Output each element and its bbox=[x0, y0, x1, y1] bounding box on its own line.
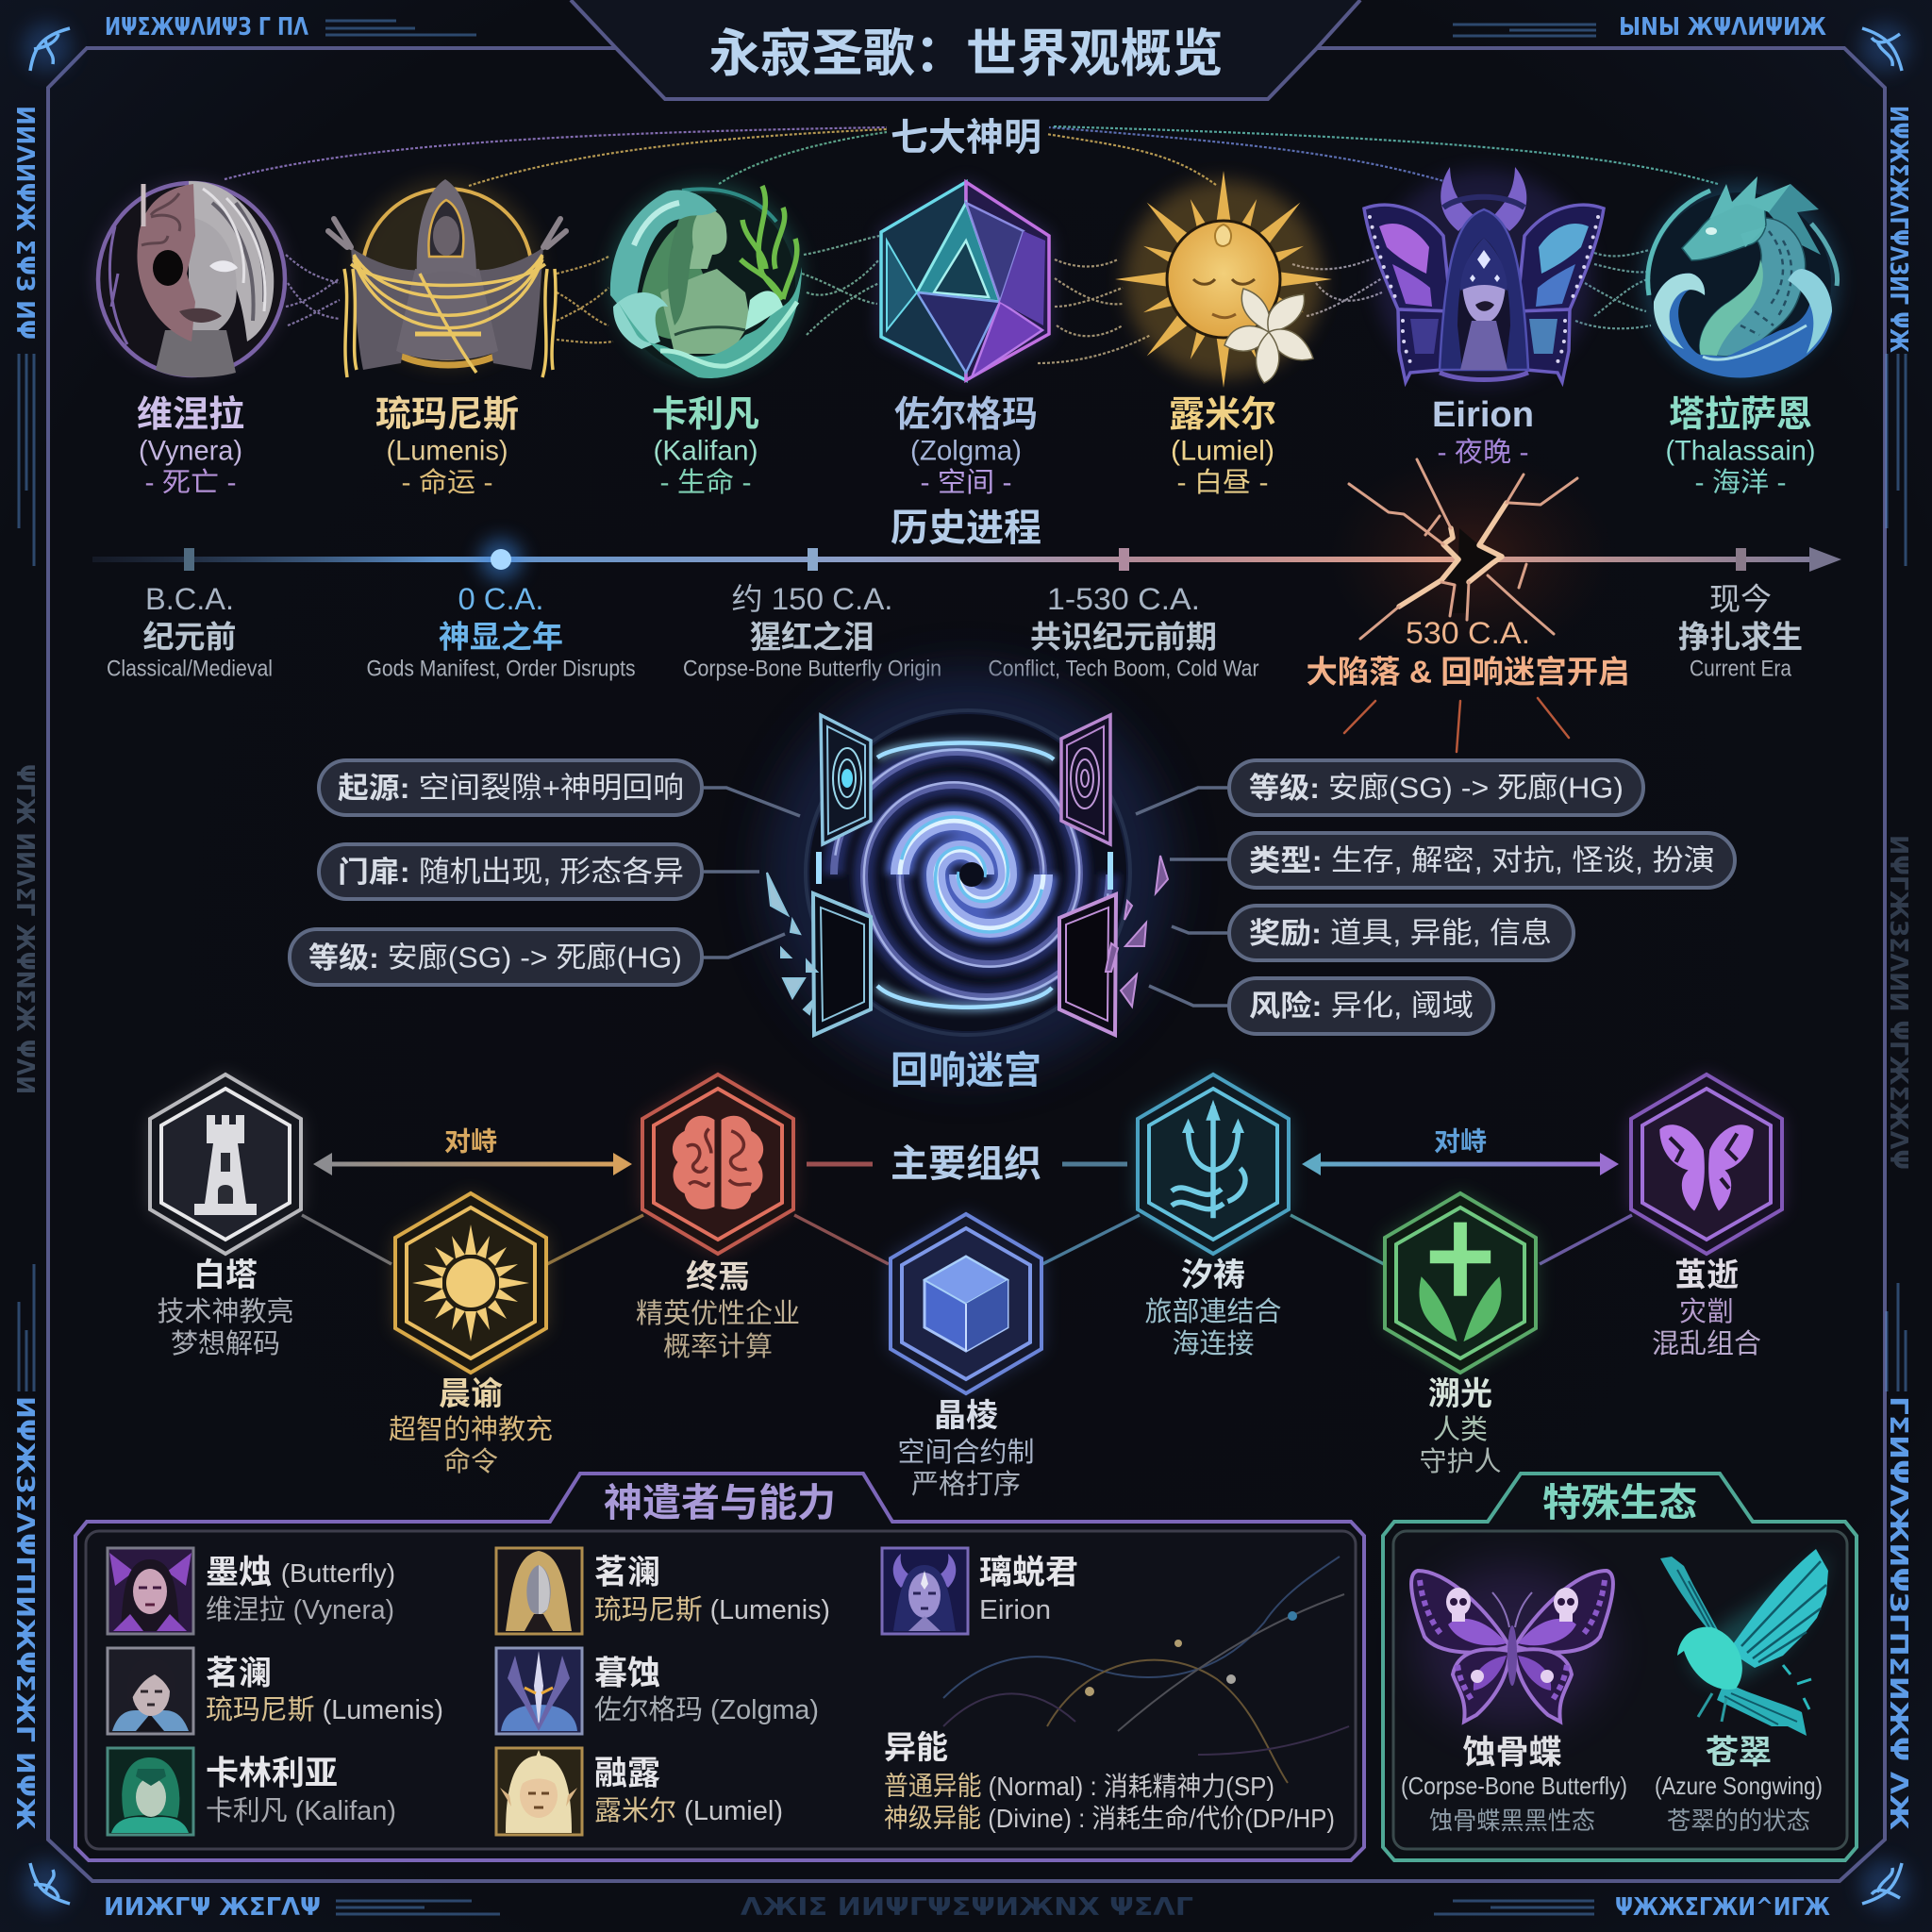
entry: Minglan gold: 茗澜 bbox=[594, 1555, 660, 1591]
org: Cocoon Passing: 茧逝 bbox=[1674, 1257, 1739, 1293]
callout: types: 类型: 生存, 解密, 对抗, 怪谈, 扮演 bbox=[1249, 843, 1715, 877]
Kalifan name: - 生命 - bbox=[660, 467, 751, 498]
border runes: ИΨΣЖΨΛИΨЗ Γ ΠΛ bbox=[105, 13, 308, 42]
abilities text bbox=[884, 1730, 1335, 1832]
timeline labels: 大陷落 & 回响迷宫开启 bbox=[1306, 655, 1630, 689]
god: Lumiel bbox=[1115, 171, 1332, 388]
Zolgma name: 佐尔格玛 bbox=[894, 395, 1038, 435]
portrait: Minglan gold bbox=[496, 1548, 582, 1634]
entry: Eirion: Eirion bbox=[979, 1595, 1051, 1625]
entry: Butterfly: 墨烛 (Butterfly) bbox=[206, 1555, 395, 1591]
timeline labels: Gods Manifest, Order Disrupts bbox=[366, 657, 636, 681]
creature labels: songwing: (Azure Songwing) bbox=[1655, 1772, 1823, 1800]
callout: rank left: 等级: 安廊(SG) -> 死廊(HG) bbox=[308, 941, 682, 974]
org: Dawn Oracle: 晨谕 bbox=[439, 1376, 503, 1412]
timeline labels: 共识纪元前期 bbox=[1030, 619, 1217, 655]
portrait: Muzhu bbox=[496, 1648, 582, 1734]
org: Cocoon Passing bbox=[1631, 1074, 1782, 1359]
border runes: ИΨЖЗΣΛΨΓΠИЖΨΣЖΓ ИΨЖ bbox=[10, 1396, 39, 1830]
border runes: ИΨΓЖЗΣΛИИ ΨΓЖΣЖΛΨ bbox=[1884, 835, 1912, 1170]
border runes: ИИЖΓΨ ЖΣΓΛΨ bbox=[104, 1893, 321, 1922]
Lumiel name: - 白昼 - bbox=[1177, 467, 1268, 498]
door bottom right shattered bbox=[1059, 856, 1168, 1035]
org: Crystal Edge bbox=[891, 1214, 1041, 1500]
opposition arrow right: 对峙 bbox=[1434, 1126, 1487, 1157]
callout: risk: 风险: 异化, 阈域 bbox=[1249, 989, 1474, 1023]
abilities text: 神级异能 (Divine) : 消耗生命/代价(DP/HP) bbox=[884, 1804, 1335, 1832]
entry: Butterfly bbox=[206, 1555, 395, 1625]
door top left bbox=[821, 715, 871, 844]
door bottom left shattered bbox=[767, 873, 871, 1035]
Kalifan name: 卡利凡 bbox=[652, 395, 759, 435]
callout: rank right bbox=[1229, 760, 1643, 815]
Eirion name: - 夜晚 - bbox=[1438, 437, 1528, 468]
callout: rank left bbox=[290, 929, 702, 985]
panel heading: 神遣者与能力 bbox=[604, 1481, 836, 1524]
org: Dawn Oracle bbox=[389, 1193, 553, 1477]
icon: corpse-bone butterfly bbox=[1411, 1566, 1613, 1726]
timeline labels: 挣扎求生 bbox=[1678, 619, 1803, 655]
opposition arrow right bbox=[1302, 1126, 1619, 1175]
timeline labels: Corpse-Bone Butterfly Origin bbox=[683, 657, 941, 681]
ability curves bbox=[943, 1557, 1349, 1783]
creature labels: butterfly: 蚀骨蝶黑黑性态 bbox=[1429, 1807, 1595, 1835]
entry: Minglan gold: 琉玛尼斯 (Lumenis) bbox=[594, 1594, 830, 1625]
entry: Kalinliya: 卡利凡 (Kalifan) bbox=[206, 1795, 396, 1826]
heading: history: 历史进程 bbox=[891, 508, 1041, 549]
Lumenis name bbox=[375, 395, 519, 498]
panel: emissaries and abilities bbox=[75, 1474, 1364, 1860]
org: Finality: 精英优性企业 bbox=[636, 1298, 800, 1329]
org connectors bbox=[302, 1164, 1632, 1264]
creature labels: butterfly: (Corpse-Bone Butterfly) bbox=[1401, 1772, 1627, 1800]
org: White Tower: 白塔 bbox=[193, 1257, 258, 1293]
panel: special ecology bbox=[1383, 1474, 1857, 1860]
entry: Minglan dark: 琉玛尼斯 (Lumenis) bbox=[206, 1694, 443, 1725]
timeline labels: Current Era bbox=[1690, 657, 1792, 681]
callout: rank right: 等级: 安廊(SG) -> 死廊(HG) bbox=[1249, 772, 1624, 804]
Vynera name: (Vynera) bbox=[139, 436, 242, 466]
org: White Tower: 技术神教亮 bbox=[157, 1296, 294, 1327]
org: Tide Prayer bbox=[1138, 1074, 1289, 1359]
Lumenis name: 琉玛尼斯 bbox=[375, 395, 519, 435]
entry: Muzhu: 佐尔格玛 (Zolgma) bbox=[594, 1694, 819, 1725]
heading: organizations: 主要组织 bbox=[891, 1143, 1041, 1185]
timeline labels: 0 C.A. bbox=[458, 582, 543, 616]
creature labels: songwing bbox=[1655, 1734, 1823, 1835]
bright ring arcs bbox=[819, 742, 1110, 1008]
org: Tide Prayer: 旅部連结合 bbox=[1144, 1296, 1282, 1327]
timeline labels bbox=[107, 581, 1803, 689]
callouts left bbox=[290, 760, 702, 985]
vortex arms bbox=[823, 734, 1121, 1015]
entry: Ronglu bbox=[594, 1755, 783, 1826]
creature labels: songwing: 苍翠的的状态 bbox=[1667, 1807, 1810, 1835]
timeline labels: 神显之年 bbox=[439, 619, 563, 655]
timeline labels: 猩红之泪 bbox=[750, 619, 874, 655]
border runes: ИΨЖΣЖΛΓΨΛЗИΓ ΨЖ bbox=[1884, 106, 1912, 353]
timeline labels: 530 C.A. bbox=[1406, 616, 1530, 650]
portrait: Eirion bbox=[882, 1548, 968, 1634]
Zolgma name: - 空间 - bbox=[921, 467, 1011, 498]
opposition arrow left bbox=[313, 1126, 632, 1175]
border runes: ΨΓЖ ИИΛΣΓ ЖΨΝΣЖ ΨΛИ bbox=[10, 764, 39, 1094]
door top right bbox=[1061, 715, 1110, 844]
callout: threshold: 门扉: 随机出现, 形态各异 bbox=[338, 855, 684, 889]
Zolgma name: (Zolgma) bbox=[910, 436, 1022, 466]
god: Lumenis bbox=[328, 179, 566, 377]
callout: rewards bbox=[1229, 906, 1574, 960]
org: Cocoon Passing: 混乱组合 bbox=[1652, 1328, 1761, 1359]
org: Crystal Edge: 晶棱 bbox=[934, 1398, 998, 1434]
Eirion name: Eirion bbox=[1432, 395, 1534, 435]
entry: Ronglu: 融露 bbox=[594, 1755, 660, 1792]
entry: Eirion: 璃蜕君 bbox=[979, 1555, 1078, 1591]
org: Tide Prayer: 海连接 bbox=[1172, 1328, 1255, 1359]
org: Retro Light: 溯光 bbox=[1428, 1376, 1492, 1412]
portal illustration bbox=[765, 670, 1171, 1075]
icon: azure songwing bbox=[1660, 1549, 1828, 1736]
abilities text: 异能 bbox=[884, 1730, 948, 1766]
org: Retro Light: 守护人 bbox=[1419, 1446, 1502, 1477]
right wings bbox=[1517, 205, 1604, 382]
border runes: ΛЖΙΣ ИИΨΓΨΣΨИЖΝΧ ΨΣΛΓ bbox=[741, 1893, 1193, 1922]
heading: seven gods: 七大神明 bbox=[891, 117, 1041, 158]
god: Vynera bbox=[97, 181, 286, 377]
panel heading: 特殊生态 bbox=[1542, 1481, 1697, 1524]
border runes: ΨЖЖΣΓЖИ^ИΓЖ bbox=[1615, 1893, 1830, 1922]
org: Dawn Oracle: 命令 bbox=[443, 1446, 498, 1477]
Lumenis name: - 命运 - bbox=[402, 467, 492, 498]
Eirion name bbox=[1432, 395, 1534, 468]
portrait: Ronglu bbox=[496, 1748, 582, 1835]
Thalassain name: (Thalassain) bbox=[1666, 436, 1815, 466]
god: Kalifan bbox=[609, 182, 802, 378]
entry: Ronglu: 露米尔 (Lumiel) bbox=[594, 1795, 783, 1826]
callout: origin: 起源: 空间裂隙+神明回响 bbox=[338, 772, 684, 804]
title: 永寂圣歌：世界观概览 bbox=[708, 25, 1224, 83]
god names bbox=[137, 395, 1815, 498]
border runes: ИИΛИΨЖ ΣΨЗ ИΨ bbox=[10, 106, 39, 340]
Lumiel name: (Lumiel) bbox=[1171, 436, 1274, 466]
callouts right bbox=[1229, 760, 1735, 1034]
entry: Minglan gold bbox=[594, 1555, 830, 1625]
border runes: ЫΝЫ ЖΨΛИΨИЖ bbox=[1619, 13, 1826, 42]
Thalassain name bbox=[1666, 395, 1815, 498]
left wings bbox=[1364, 205, 1451, 382]
god: Zolgma bbox=[881, 182, 1049, 380]
Lumiel name bbox=[1169, 395, 1276, 498]
Zolgma name bbox=[894, 395, 1038, 498]
org: Finality: 概率计算 bbox=[663, 1331, 773, 1362]
org: Cocoon Passing: 灾劏 bbox=[1679, 1296, 1734, 1327]
entry: Muzhu: 暮蚀 bbox=[594, 1655, 660, 1692]
opposition arrow left: 对峙 bbox=[444, 1126, 497, 1157]
callout: types bbox=[1229, 833, 1735, 888]
creature labels: butterfly: 蚀骨蝶 bbox=[1462, 1734, 1562, 1772]
Vynera name bbox=[137, 395, 244, 498]
org: White Tower bbox=[150, 1074, 301, 1359]
portrait: Minglan dark bbox=[108, 1648, 193, 1734]
entry: Eirion bbox=[979, 1555, 1078, 1625]
Thalassain name: - 海洋 - bbox=[1694, 467, 1787, 498]
Lumiel name: 露米尔 bbox=[1169, 395, 1276, 435]
entry: Kalinliya: 卡林利亚 bbox=[206, 1755, 338, 1792]
org: Retro Light: 人类 bbox=[1433, 1414, 1488, 1445]
timeline bbox=[92, 453, 1841, 752]
org: Crystal Edge: 严格打序 bbox=[911, 1469, 1021, 1500]
Kalifan name: (Kalifan) bbox=[653, 436, 758, 466]
timeline labels: Conflict, Tech Boom, Cold War bbox=[989, 657, 1259, 681]
heading: echo labyrinth: 回响迷宫 bbox=[891, 1050, 1041, 1091]
border runes: ΓΣИΨΛЖИΨЗΓΠΣИЖΨ ΛЖ bbox=[1884, 1396, 1912, 1830]
timeline labels: 纪元前 bbox=[143, 619, 236, 655]
org: Finality bbox=[636, 1074, 800, 1362]
creature labels: butterfly bbox=[1401, 1734, 1627, 1835]
callout connector lines bbox=[704, 788, 1227, 1006]
callout: threshold bbox=[319, 844, 702, 899]
portrait: Butterfly bbox=[108, 1548, 193, 1634]
callout: risk bbox=[1229, 978, 1493, 1034]
timeline labels: B.C.A. bbox=[145, 582, 234, 616]
entry: Minglan dark bbox=[206, 1655, 443, 1725]
connection threads bbox=[225, 126, 1718, 363]
timeline labels: Classical/Medieval bbox=[107, 657, 273, 681]
Lumenis name: (Lumenis) bbox=[387, 436, 508, 466]
god: Eirion bbox=[1364, 167, 1604, 387]
entry: Minglan dark: 茗澜 bbox=[206, 1655, 272, 1692]
abilities text: 普通异能 (Normal) : 消耗精神力(SP) bbox=[884, 1772, 1274, 1800]
Vynera name: - 死亡 - bbox=[145, 467, 236, 498]
org: Dawn Oracle: 超智的神教充 bbox=[389, 1414, 553, 1445]
org: Finality: 终焉 bbox=[686, 1259, 750, 1295]
entry: Muzhu bbox=[594, 1655, 819, 1725]
Kalifan name bbox=[652, 395, 759, 498]
Vynera name: 维涅拉 bbox=[137, 395, 244, 435]
entry: Kalinliya bbox=[206, 1755, 396, 1826]
callout: rewards: 奖励: 道具, 异能, 信息 bbox=[1249, 917, 1552, 949]
callout: origin bbox=[319, 760, 702, 815]
crack burst bbox=[1344, 459, 1577, 752]
timeline labels: 现今 bbox=[1709, 581, 1772, 617]
org: Tide Prayer: 汐祷 bbox=[1181, 1257, 1245, 1293]
Thalassain name: 塔拉萨恩 bbox=[1669, 395, 1812, 435]
timeline labels: 约 150 C.A. bbox=[732, 582, 892, 616]
org: White Tower: 梦想解码 bbox=[171, 1328, 280, 1359]
creature labels: songwing: 苍翠 bbox=[1706, 1734, 1772, 1772]
entry: Butterfly: 维涅拉 (Vynera) bbox=[206, 1594, 394, 1625]
timeline labels: 1-530 C.A. bbox=[1047, 582, 1200, 616]
god: Thalassain bbox=[1642, 176, 1839, 379]
org: Crystal Edge: 空间合约制 bbox=[897, 1437, 1035, 1468]
portrait: Kalinliya bbox=[108, 1748, 193, 1835]
org: Retro Light bbox=[1385, 1193, 1536, 1477]
